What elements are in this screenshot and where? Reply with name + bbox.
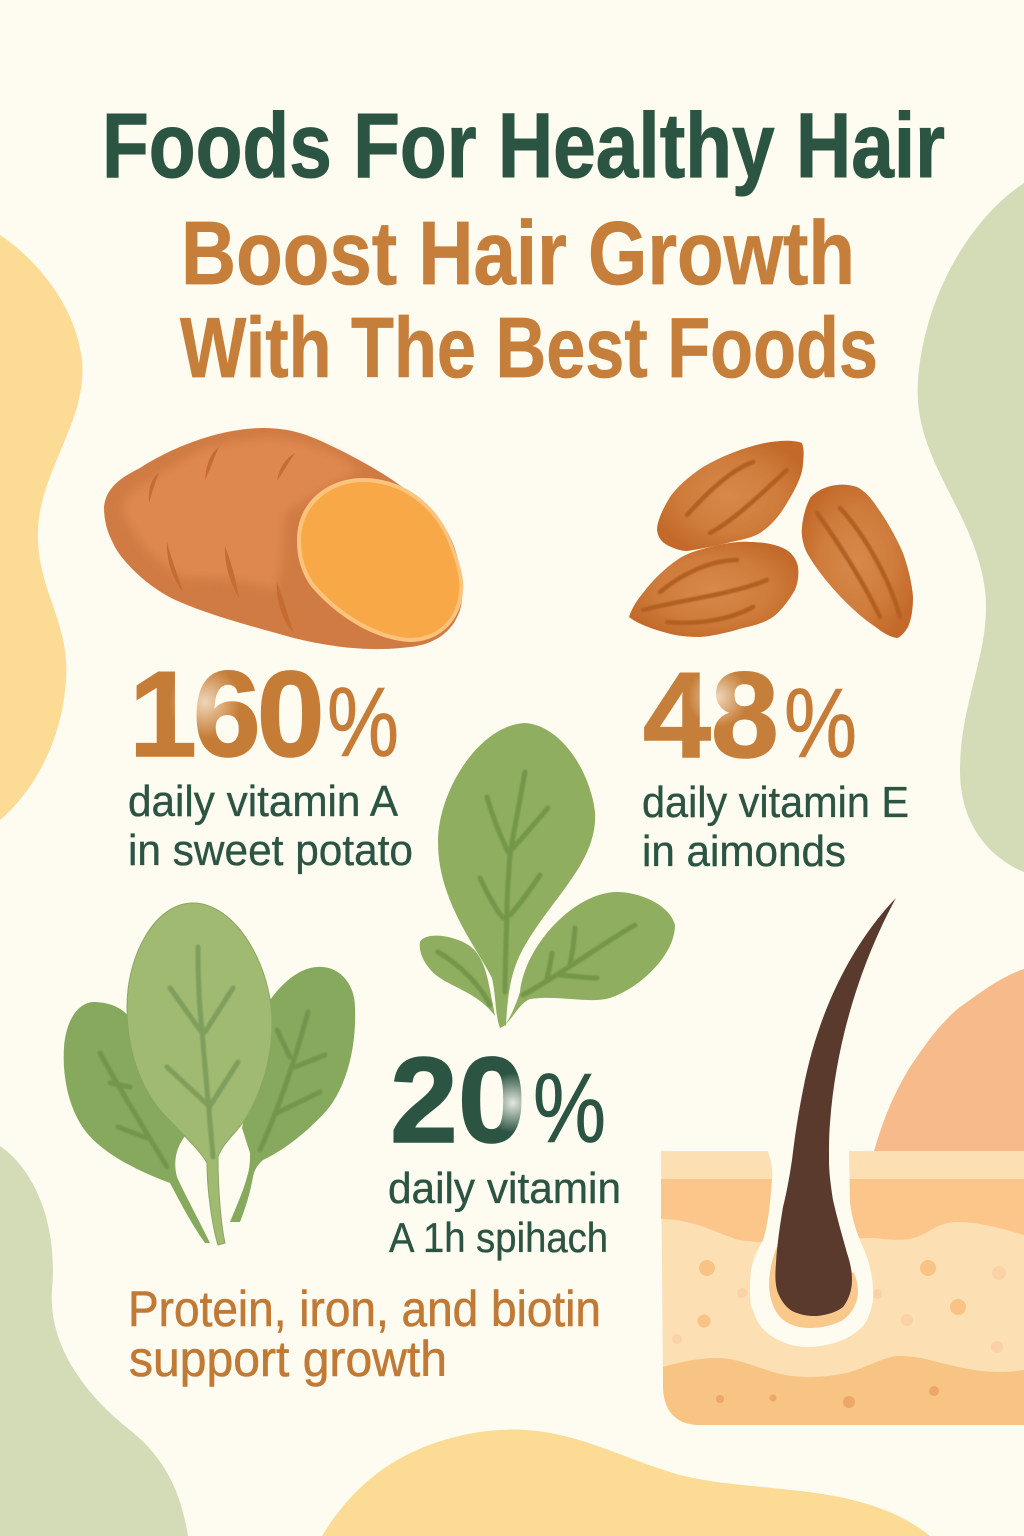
stat number: 20%: % xyxy=(533,1053,606,1163)
blob: right green xyxy=(918,183,1024,872)
skin bottom layer xyxy=(663,1356,1024,1425)
subtitle xyxy=(180,204,878,396)
stat label: spinach: A 1h spihach xyxy=(389,1214,608,1261)
bunch center leaf xyxy=(127,903,272,1245)
stat number: 160%: 160 xyxy=(129,646,321,782)
almond 3 xyxy=(802,485,913,638)
icon: spinach sprig xyxy=(420,723,675,1028)
blob: left yellow xyxy=(0,235,83,820)
stat number: 48%: % xyxy=(784,668,857,778)
icon: spinach bunch xyxy=(64,903,355,1245)
stat label: almonds xyxy=(642,778,909,876)
sweet potato cut face xyxy=(297,478,463,642)
stat label: sweet potato xyxy=(128,777,413,875)
icon: sweet potato xyxy=(104,428,463,649)
sprig left leaf xyxy=(420,936,495,1016)
almond 1 xyxy=(657,441,804,551)
blob: bottom yellow xyxy=(322,1430,930,1536)
bunch left leaf xyxy=(64,1002,210,1243)
stat label: sweet potato: daily vitamin A xyxy=(128,777,399,826)
follicle inner xyxy=(769,1247,858,1328)
stat: almonds xyxy=(642,647,909,876)
follicle opening xyxy=(750,1151,873,1347)
skin band xyxy=(661,1179,1024,1243)
stat label: spinach xyxy=(388,1164,621,1261)
note: protein, iron and biotin: Protein, iron, and biotin xyxy=(128,1281,601,1337)
sprig right leaf xyxy=(505,892,675,1025)
blob: bottom left green xyxy=(0,1146,188,1536)
stat label: almonds: daily vitamin E xyxy=(642,778,909,827)
subtitle: With The Best Foods xyxy=(180,301,878,396)
stat number: 20%: 20 xyxy=(390,1032,526,1168)
stat label: almonds: in aimonds xyxy=(642,827,846,876)
icon: hair follicle in scalp xyxy=(661,898,1024,1425)
stat: sweet potato xyxy=(128,646,413,875)
almond 2 xyxy=(629,542,798,637)
stat label: sweet potato: in sweet potato xyxy=(128,826,413,875)
stat number: 160%: % xyxy=(327,667,399,777)
subtitle: Boost Hair Growth xyxy=(181,204,855,304)
bunch right leaf xyxy=(230,967,355,1222)
note: protein, iron and biotin: support growth xyxy=(129,1331,447,1387)
blob: right peach xyxy=(873,969,1024,1155)
stat number: 48%: 48 xyxy=(643,647,779,783)
hair strand xyxy=(775,898,896,1316)
skin base layer xyxy=(661,1151,1024,1425)
stat: spinach xyxy=(388,1032,621,1261)
icon: almonds xyxy=(629,441,913,638)
sprig main leaf xyxy=(438,723,595,1028)
note: protein, iron and biotin xyxy=(128,1281,601,1387)
stat label: spinach: daily vitamin xyxy=(388,1164,621,1213)
